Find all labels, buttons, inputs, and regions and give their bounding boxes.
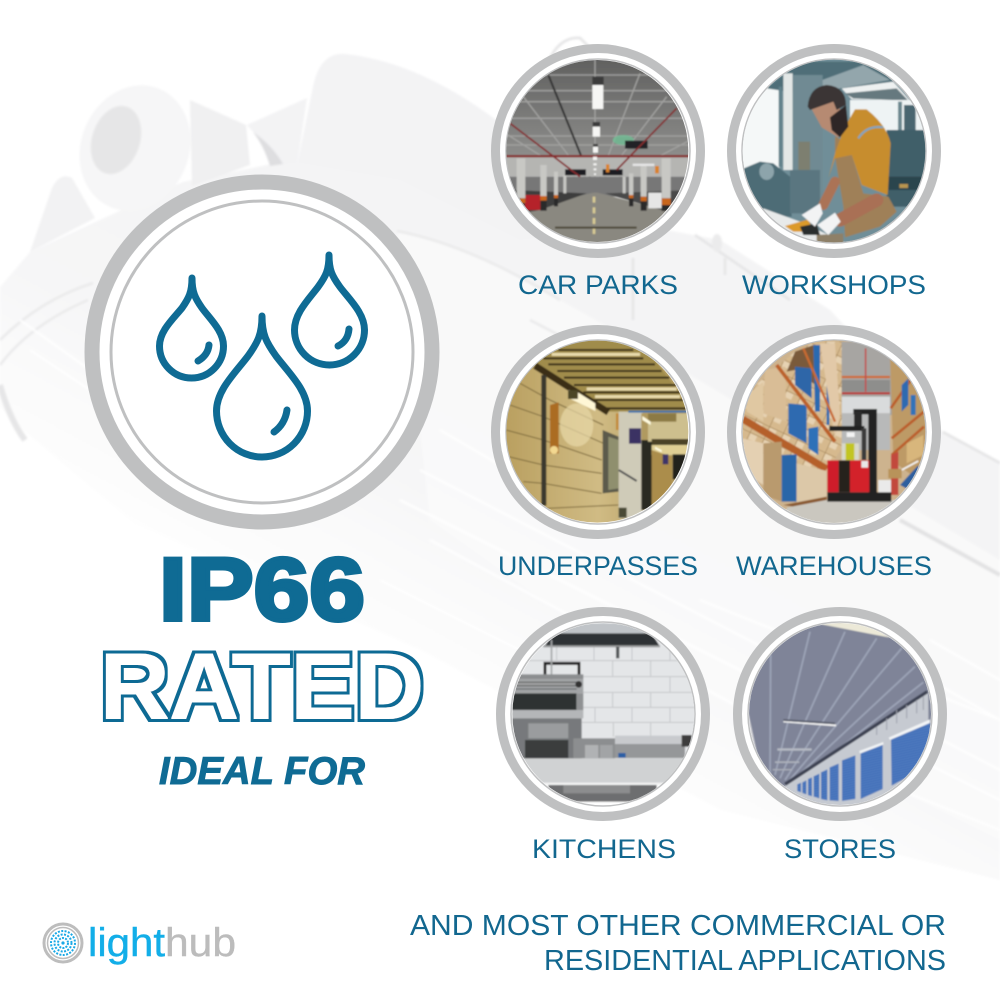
label: kitchens: KITCHENS <box>532 834 676 864</box>
heading: IP66: IP66 <box>159 539 365 639</box>
photo: underpass corridor <box>506 340 688 523</box>
label: workshops: WORKSHOPS <box>742 270 926 300</box>
heading: RATED outlined: RATED <box>100 634 424 738</box>
closing line 1: AND MOST OTHER COMMERCIAL OR <box>410 910 946 942</box>
label: warehouses: WAREHOUSES <box>736 551 932 581</box>
logo wordmark hub: hub <box>165 921 236 965</box>
panel: car parks <box>496 48 700 300</box>
badge disc and rings <box>92 182 432 522</box>
label: stores: STORES <box>784 834 896 864</box>
panel: stores <box>738 612 942 864</box>
ring <box>732 330 936 534</box>
subheading: IDEAL FOR: IDEAL FOR <box>159 750 365 793</box>
photo: storage units <box>743 622 937 812</box>
label: underpasses: UNDERPASSES <box>498 551 698 581</box>
label: car parks: CAR PARKS <box>518 270 678 300</box>
photo: commercial kitchen <box>508 622 698 808</box>
icon: three water drops <box>160 255 364 457</box>
photo: car park interior <box>506 60 688 242</box>
closing text <box>410 910 946 977</box>
closing line 2: RESIDENTIAL APPLICATIONS <box>544 945 946 977</box>
panel: warehouses <box>732 330 936 581</box>
logo mark <box>44 924 82 962</box>
panel: water drop badge <box>92 182 432 522</box>
ring <box>496 330 700 534</box>
photo: warehouse with forklift <box>740 338 930 525</box>
logo wordmark light: light <box>88 921 165 965</box>
logo: lighthub <box>44 921 236 965</box>
ring <box>732 48 936 254</box>
panel: workshops <box>732 48 936 300</box>
panel: underpasses <box>496 330 700 581</box>
photo: worker in workshop <box>740 57 930 247</box>
panel: kitchens <box>500 612 706 864</box>
ring <box>496 48 700 254</box>
ring <box>738 612 942 816</box>
ring <box>500 612 706 816</box>
